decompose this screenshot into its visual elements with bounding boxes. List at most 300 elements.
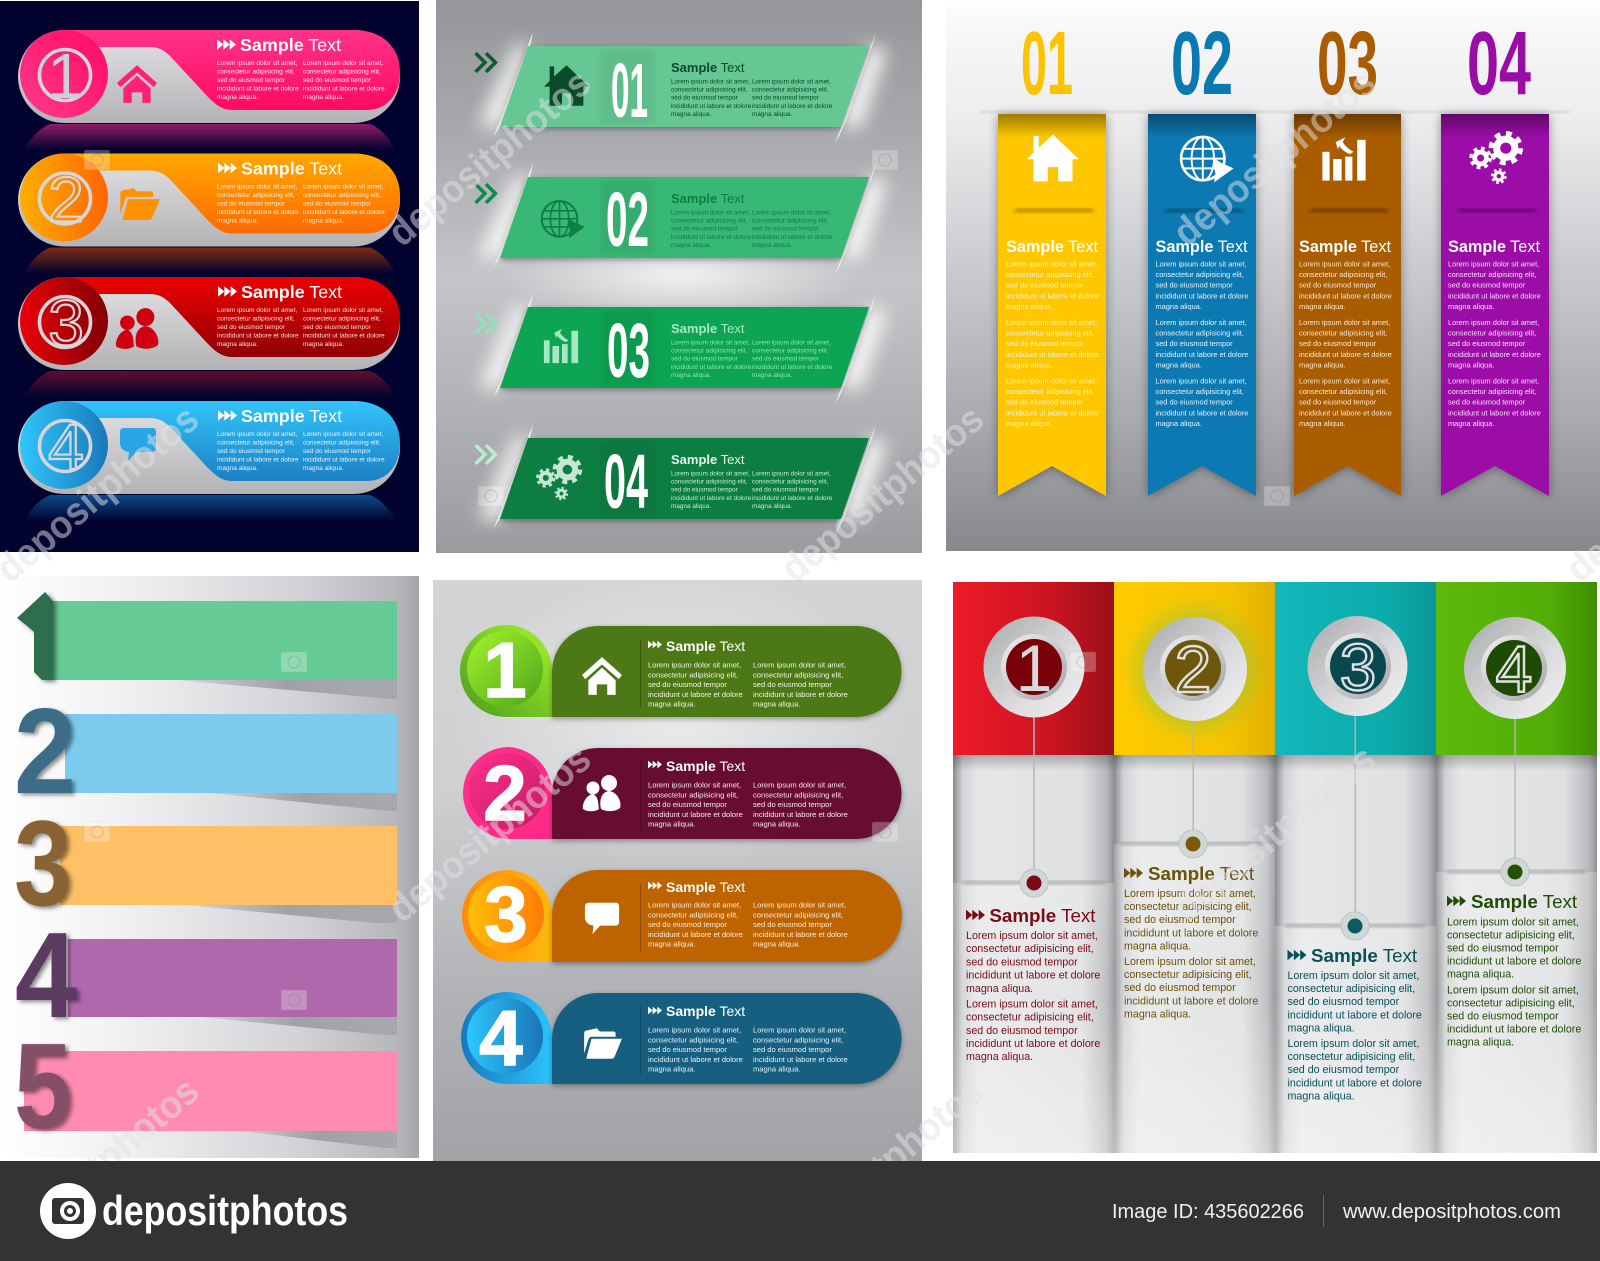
body text: incididunt ut labore et dolore xyxy=(752,234,833,241)
body text: Lorem ipsum dolor sit amet, xyxy=(1156,318,1247,327)
icon: gears xyxy=(538,457,580,499)
number 01: 01 xyxy=(1021,14,1073,114)
pin xyxy=(1341,912,1369,940)
body text: magna aliqua. xyxy=(1156,419,1202,428)
body text: sed do eiusmod tempor xyxy=(1006,398,1084,407)
body text xyxy=(671,470,833,510)
body text: magna aliqua. xyxy=(753,820,800,829)
digit 4: 4 xyxy=(479,994,523,1082)
body text: incididunt ut labore et dolore xyxy=(966,970,1100,982)
panel: green slanted ribbons xyxy=(436,0,922,553)
body text: Lorem ipsum dolor sit amet, xyxy=(966,998,1098,1010)
body text xyxy=(671,339,833,379)
body text: incididunt ut labore et dolore xyxy=(752,364,833,371)
body text: magna aliqua. xyxy=(671,503,711,510)
body text: sed do eiusmod tempor xyxy=(752,95,820,102)
heading: Sample Text xyxy=(671,191,745,206)
ribbon 01 xyxy=(476,32,886,144)
heading: Sample Text xyxy=(1311,945,1418,966)
body text: incididunt ut labore et dolore xyxy=(752,495,833,502)
body text: incididunt ut labore et dolore xyxy=(671,234,752,241)
body text: sed do eiusmod tempor xyxy=(648,1045,727,1054)
body text: consectetur adipisicing elit, xyxy=(752,86,829,94)
body text: Lorem ipsum dolor sit amet, xyxy=(648,661,741,670)
body text: sed do eiusmod tempor xyxy=(752,226,820,233)
body text: consectetur adipisicing elit, xyxy=(648,1035,738,1044)
body text: Lorem ipsum dolor sit amet, xyxy=(752,209,831,216)
body text: consectetur adipisicing elit, xyxy=(1288,983,1415,995)
body text: consectetur adipisicing elit, xyxy=(217,440,295,446)
body text: incididunt ut labore et dolore xyxy=(753,930,848,939)
body text: consectetur adipisicing elit, xyxy=(1299,270,1387,279)
digit 1: 1 xyxy=(47,40,83,112)
body text: Lorem ipsum dolor sit amet, xyxy=(1299,259,1390,268)
body text: Lorem ipsum dolor sit amet, xyxy=(648,781,741,790)
banner 1: pink xyxy=(18,30,400,150)
digit 4: 4 xyxy=(1496,632,1532,706)
column 3: teal xyxy=(1275,582,1436,1153)
body text xyxy=(217,60,385,101)
body text: consectetur adipisicing elit, xyxy=(1448,328,1536,338)
heading: Sample Text xyxy=(666,1003,745,1019)
body text: consectetur adipisicing elit, xyxy=(1156,328,1244,338)
body text: magna aliqua. xyxy=(217,94,258,101)
digit 2: 2 xyxy=(48,164,84,236)
number 02: 02 xyxy=(1171,14,1233,114)
bar 1 xyxy=(17,592,397,680)
body text: magna aliqua. xyxy=(1156,361,1202,370)
icon: house xyxy=(544,65,589,106)
body text: consectetur adipisicing elit, xyxy=(671,218,748,224)
heading: Sample Text xyxy=(989,905,1096,926)
body text: consectetur adipisicing elit, xyxy=(752,478,829,486)
body text: incididunt ut labore et dolore xyxy=(1156,408,1248,417)
body text: magna aliqua. xyxy=(1288,1090,1355,1102)
chevron xyxy=(476,314,495,333)
body text: magna aliqua. xyxy=(303,218,344,224)
body text: Lorem ipsum dolor sit amet, xyxy=(217,60,297,67)
heading: Sample Text xyxy=(1299,238,1391,256)
body text: Lorem ipsum dolor sit amet, xyxy=(1448,318,1539,327)
heading: Sample Text xyxy=(1448,238,1540,256)
body text: incididunt ut labore et dolore xyxy=(752,103,833,110)
icon: folder xyxy=(584,1028,622,1059)
number 04: 04 xyxy=(1467,14,1531,114)
pill 1: green xyxy=(460,625,902,717)
bar 4 xyxy=(15,907,397,1043)
digit 5: 5 xyxy=(14,1018,72,1154)
body text: incididunt ut labore et dolore xyxy=(1288,1077,1422,1089)
body text: Lorem ipsum dolor sit amet, xyxy=(1288,970,1419,982)
body text: magna aliqua. xyxy=(648,820,695,829)
panel: four columns with pins xyxy=(953,582,1597,1153)
body text: incididunt ut labore et dolore xyxy=(217,86,299,92)
icon: gears xyxy=(1471,134,1520,183)
body text: incididunt ut labore et dolore xyxy=(648,930,743,939)
body text: Lorem ipsum dolor sit amet, xyxy=(303,307,383,314)
pin xyxy=(1179,830,1207,858)
banner 2: orange xyxy=(18,154,400,274)
body text: Lorem ipsum dolor sit amet, xyxy=(648,1026,741,1035)
heading: Sample Text xyxy=(1148,863,1255,884)
pill 4: blue xyxy=(461,992,902,1084)
body text xyxy=(1447,916,1581,1049)
body text: consectetur adipisicing elit, xyxy=(303,68,381,76)
body text: incididunt ut labore et dolore xyxy=(217,209,299,216)
body text: consectetur adipisicing elit, xyxy=(217,68,295,76)
heading: Sample Text xyxy=(666,879,745,895)
body text: magna aliqua. xyxy=(648,700,695,709)
body text: sed do eiusmod tempor xyxy=(1156,339,1233,348)
digit 3: 3 xyxy=(48,287,84,359)
body text: Lorem ipsum dolor sit amet, xyxy=(1006,376,1097,385)
chevron xyxy=(476,445,495,464)
body text: sed do eiusmod tempor xyxy=(671,226,739,233)
body text: sed do eiusmod tempor xyxy=(671,95,739,102)
column 02: blue xyxy=(1148,14,1256,496)
body text: magna aliqua. xyxy=(217,218,258,224)
pill 3: orange xyxy=(462,870,902,962)
body text: incididunt ut labore et dolore xyxy=(1299,350,1392,359)
number 03: 03 xyxy=(607,308,650,394)
body text: consectetur adipisicing elit, xyxy=(1299,387,1387,396)
icon: house xyxy=(582,657,622,695)
body text: sed do eiusmod tempor xyxy=(1006,339,1084,348)
body text: sed do eiusmod tempor xyxy=(1447,942,1559,954)
body text: magna aliqua. xyxy=(1447,969,1514,981)
body text: magna aliqua. xyxy=(1288,1022,1355,1034)
watermarks: depositphotos xyxy=(380,61,599,255)
heading: Sample Text xyxy=(241,282,342,302)
body text: magna aliqua. xyxy=(753,940,800,949)
chevron xyxy=(476,53,495,72)
body text: Lorem ipsum dolor sit amet, xyxy=(303,184,383,190)
bar 3 xyxy=(14,795,397,931)
heading: Sample Text xyxy=(671,321,745,336)
body text: incididunt ut labore et dolore xyxy=(753,810,848,819)
pin xyxy=(1501,858,1529,886)
bar 5 xyxy=(14,1018,397,1154)
digit 3: 3 xyxy=(14,795,72,931)
body text: incididunt ut labore et dolore xyxy=(648,1055,743,1064)
body text: Lorem ipsum dolor sit amet, xyxy=(966,930,1098,942)
body text: sed do eiusmod tempor xyxy=(303,324,372,331)
body text xyxy=(1299,259,1392,428)
body text: incididunt ut labore et dolore xyxy=(1288,1009,1422,1021)
body text: Lorem ipsum dolor sit amet, xyxy=(752,339,831,346)
icon: house xyxy=(1027,135,1079,181)
digit 3: 3 xyxy=(484,870,528,958)
watermarks: depositphotos xyxy=(380,737,599,931)
body text: sed do eiusmod tempor xyxy=(1448,398,1526,407)
body text: Lorem ipsum dolor sit amet, xyxy=(1448,259,1539,268)
body text: Lorem ipsum dolor sit amet, xyxy=(1299,376,1390,385)
body text: sed do eiusmod tempor xyxy=(1448,281,1526,290)
body text: sed do eiusmod tempor xyxy=(966,1025,1078,1037)
body text: magna aliqua. xyxy=(671,242,711,249)
body text: magna aliqua. xyxy=(303,465,344,472)
column 2: yellow xyxy=(1114,582,1275,1153)
body text: consectetur adipisicing elit, xyxy=(1448,387,1536,396)
body text: magna aliqua. xyxy=(752,242,792,249)
ribbon 01: 01 xyxy=(611,48,648,134)
heading: Sample Text xyxy=(1156,238,1248,256)
icon: bar chart xyxy=(1322,137,1366,181)
body text: incididunt ut labore et dolore xyxy=(753,1055,848,1064)
body text: consectetur adipisicing elit, xyxy=(671,348,748,354)
body text: incididunt ut labore et dolore xyxy=(648,690,743,699)
body text: Lorem ipsum dolor sit amet, xyxy=(752,470,831,477)
body text xyxy=(1124,888,1258,1020)
body text: incididunt ut labore et dolore xyxy=(753,690,848,699)
body text: Lorem ipsum dolor sit amet, xyxy=(648,901,741,910)
body text: Lorem ipsum dolor sit amet, xyxy=(1299,318,1390,327)
digit 1: 1 xyxy=(1016,631,1052,705)
body text xyxy=(648,661,848,709)
watermarks: depositphotos xyxy=(1165,61,1384,255)
icon: globe xyxy=(542,201,585,238)
body text: sed do eiusmod tempor xyxy=(671,487,739,494)
image id: Image ID: 435602266 xyxy=(1112,1201,1304,1223)
banner 4: blue xyxy=(18,401,400,521)
body text: consectetur adipisicing elit, xyxy=(1006,387,1094,396)
body text: magna aliqua. xyxy=(753,700,800,709)
body text: consectetur adipisicing elit, xyxy=(966,1012,1094,1024)
heading: Sample Text xyxy=(241,406,342,426)
camera watermark marks xyxy=(84,150,1290,1010)
body text: sed do eiusmod tempor xyxy=(1299,339,1377,348)
ribbon 03 xyxy=(476,293,886,405)
body text: consectetur adipisicing elit, xyxy=(1447,997,1575,1009)
body text: magna aliqua. xyxy=(966,1051,1033,1063)
body text: sed do eiusmod tempor xyxy=(752,487,820,494)
body text: sed do eiusmod tempor xyxy=(1299,398,1377,407)
column 04: purple xyxy=(1441,14,1549,496)
body text: incididunt ut labore et dolore xyxy=(648,810,743,819)
body text: consectetur adipisicing elit, xyxy=(753,910,843,919)
body text: Lorem ipsum dolor sit amet, xyxy=(1288,1038,1419,1050)
body text: magna aliqua. xyxy=(1006,302,1052,311)
body text: magna aliqua. xyxy=(966,983,1033,995)
body text: Lorem ipsum dolor sit amet, xyxy=(1124,956,1256,968)
body text: consectetur adipisicing elit, xyxy=(753,1035,843,1044)
panel: vertical bookmark ribbons xyxy=(946,0,1600,551)
body text: incididunt ut labore et dolore xyxy=(217,456,299,464)
body text: sed do eiusmod tempor xyxy=(217,324,286,331)
body text: incididunt ut labore et dolore xyxy=(303,209,385,216)
body text: consectetur adipisicing elit, xyxy=(671,86,748,94)
digit 2: 2 xyxy=(483,749,527,837)
body text: sed do eiusmod tempor xyxy=(648,920,727,929)
heading: Sample Text xyxy=(671,452,745,467)
body text: sed do eiusmod tempor xyxy=(303,448,372,455)
body text: incididunt ut labore et dolore xyxy=(1448,291,1541,300)
body text: consectetur adipisicing elit, xyxy=(1006,328,1094,338)
body text: Lorem ipsum dolor sit amet, xyxy=(1156,376,1247,385)
digit 4: 4 xyxy=(48,411,84,483)
body text: incididunt ut labore et dolore xyxy=(671,364,752,371)
body text: incididunt ut labore et dolore xyxy=(1299,291,1392,300)
body text: consectetur adipisicing elit, xyxy=(648,790,738,799)
body text: sed do eiusmod tempor xyxy=(753,800,832,809)
body text: sed do eiusmod tempor xyxy=(1006,281,1084,290)
body text: magna aliqua. xyxy=(1124,1008,1191,1020)
body text: Lorem ipsum dolor sit amet, xyxy=(671,209,750,216)
body text: magna aliqua. xyxy=(752,111,792,118)
body text: sed do eiusmod tempor xyxy=(1156,398,1233,407)
column 4: green xyxy=(1436,582,1597,1153)
body text: Lorem ipsum dolor sit amet, xyxy=(671,470,750,477)
body text: Lorem ipsum dolor sit amet, xyxy=(1448,376,1539,385)
body text: sed do eiusmod tempor xyxy=(753,1045,832,1054)
body text: consectetur adipisicing elit, xyxy=(1124,969,1252,981)
body text: incididunt ut labore et dolore xyxy=(1448,408,1541,417)
body text xyxy=(217,431,385,472)
body text: magna aliqua. xyxy=(1156,302,1202,311)
body text xyxy=(1288,970,1422,1102)
pill 2: maroon xyxy=(463,747,902,839)
body text: sed do eiusmod tempor xyxy=(1156,281,1233,290)
panel: dark pills with round number badges xyxy=(433,570,922,1161)
watermarks: depositphotos xyxy=(773,1069,992,1261)
body text: Lorem ipsum dolor sit amet, xyxy=(1156,259,1247,268)
body text: incididunt ut labore et dolore xyxy=(1006,350,1099,359)
body text: sed do eiusmod tempor xyxy=(1288,1064,1400,1076)
body text: magna aliqua. xyxy=(1299,302,1345,311)
watermarks: depositphotos xyxy=(773,397,992,591)
body text: Lorem ipsum dolor sit amet, xyxy=(671,78,750,85)
body text: magna aliqua. xyxy=(1124,940,1191,952)
body text: consectetur adipisicing elit, xyxy=(1156,270,1244,279)
watermarks: depositphotos xyxy=(1165,737,1384,931)
body text: consectetur adipisicing elit, xyxy=(1156,387,1244,396)
body text: consectetur adipisicing elit, xyxy=(1006,270,1094,279)
body text: magna aliqua. xyxy=(1006,419,1052,428)
heading: Sample Text xyxy=(1471,891,1578,912)
logo xyxy=(40,1183,348,1239)
body text: sed do eiusmod tempor xyxy=(217,77,286,84)
number 04: 04 xyxy=(604,439,648,525)
body text xyxy=(1448,259,1541,428)
body text: Lorem ipsum dolor sit amet, xyxy=(752,78,831,85)
body text: sed do eiusmod tempor xyxy=(217,200,286,208)
body text: consectetur adipisicing elit, xyxy=(966,943,1094,955)
body text: Lorem ipsum dolor sit amet, xyxy=(303,60,383,67)
body text xyxy=(648,781,848,829)
body text: magna aliqua. xyxy=(303,94,344,101)
body text xyxy=(671,78,833,118)
body text: incididunt ut labore et dolore xyxy=(1124,927,1258,939)
body text: incididunt ut labore et dolore xyxy=(1006,408,1099,417)
body text: magna aliqua. xyxy=(648,1065,695,1074)
digit 1: 1 xyxy=(483,626,527,714)
body text: magna aliqua. xyxy=(217,341,258,348)
column 01: yellow xyxy=(998,14,1106,496)
body text: magna aliqua. xyxy=(671,111,711,118)
body text: sed do eiusmod tempor xyxy=(966,956,1078,968)
heading: Sample Text xyxy=(241,158,342,178)
body text: consectetur adipisicing elit, xyxy=(217,316,295,322)
body text: magna aliqua. xyxy=(1299,419,1345,428)
number 02: 02 xyxy=(606,177,649,263)
body text xyxy=(217,307,385,348)
website: www.depositphotos.com xyxy=(1342,1201,1561,1223)
body text xyxy=(217,184,385,224)
logo: depositphotos xyxy=(102,1187,348,1234)
body text xyxy=(966,930,1100,1063)
panel: dark navy pill banners xyxy=(0,1,419,552)
digit 2: 2 xyxy=(1175,632,1211,706)
body text: Lorem ipsum dolor sit amet, xyxy=(217,431,297,438)
body text: Lorem ipsum dolor sit amet, xyxy=(217,307,297,314)
body text: consectetur adipisicing elit, xyxy=(303,440,381,446)
body text: magna aliqua. xyxy=(648,940,695,949)
body text xyxy=(648,901,848,949)
body text: consectetur adipisicing elit, xyxy=(217,192,295,199)
body text xyxy=(1006,259,1099,428)
body text: magna aliqua. xyxy=(217,465,258,472)
body text: incididunt ut labore et dolore xyxy=(303,332,385,340)
body text: Lorem ipsum dolor sit amet, xyxy=(1447,984,1579,996)
body text: Lorem ipsum dolor sit amet, xyxy=(753,901,846,910)
chevron xyxy=(476,184,495,203)
body text: consectetur adipisicing elit, xyxy=(753,790,843,799)
icon: house xyxy=(117,65,157,103)
body text: Lorem ipsum dolor sit amet, xyxy=(753,781,846,790)
body text: consectetur adipisicing elit, xyxy=(1299,328,1387,338)
footer bar xyxy=(0,1161,1600,1261)
heading: Sample Text xyxy=(666,758,745,774)
body text: magna aliqua. xyxy=(752,503,792,510)
panel: numbered colour bars xyxy=(0,576,419,1158)
ribbon 04 xyxy=(476,424,886,536)
body text: sed do eiusmod tempor xyxy=(753,920,832,929)
body text: magna aliqua. xyxy=(1447,1037,1514,1049)
body text: magna aliqua. xyxy=(1448,419,1494,428)
body text: sed do eiusmod tempor xyxy=(303,200,372,208)
body text: magna aliqua. xyxy=(1006,361,1052,370)
body text: magna aliqua. xyxy=(752,372,792,379)
body text: Lorem ipsum dolor sit amet, xyxy=(1006,259,1097,268)
body text: consectetur adipisicing elit, xyxy=(1124,901,1252,913)
body text: incididunt ut labore et dolore xyxy=(217,332,299,340)
body text: sed do eiusmod tempor xyxy=(1448,339,1526,348)
banner 3: red xyxy=(18,277,400,397)
body text: incididunt ut labore et dolore xyxy=(966,1038,1100,1050)
body text: sed do eiusmod tempor xyxy=(1124,914,1236,926)
body text: consectetur adipisicing elit, xyxy=(1447,929,1575,941)
heading: Sample Text xyxy=(671,60,745,75)
digit 2: 2 xyxy=(14,683,76,819)
body text: incididunt ut labore et dolore xyxy=(1124,995,1258,1007)
body text: sed do eiusmod tempor xyxy=(753,680,832,689)
body text: incididunt ut labore et dolore xyxy=(1006,291,1099,300)
heading: Sample Text xyxy=(1006,238,1098,256)
body text: sed do eiusmod tempor xyxy=(648,800,727,809)
icon: folder xyxy=(120,188,160,220)
body text: magna aliqua. xyxy=(303,341,344,348)
body text: incididunt ut labore et dolore xyxy=(671,495,752,502)
body text: sed do eiusmod tempor xyxy=(1299,281,1377,290)
body text: incididunt ut labore et dolore xyxy=(1156,291,1248,300)
body text: consectetur adipisicing elit, xyxy=(752,218,829,224)
body text: incididunt ut labore et dolore xyxy=(1448,350,1541,359)
body text: Lorem ipsum dolor sit amet, xyxy=(1006,318,1097,327)
heading: Sample Text xyxy=(240,35,341,55)
bar 2 xyxy=(14,683,397,819)
icon: bar chart xyxy=(544,329,578,363)
body text: magna aliqua. xyxy=(671,372,711,379)
